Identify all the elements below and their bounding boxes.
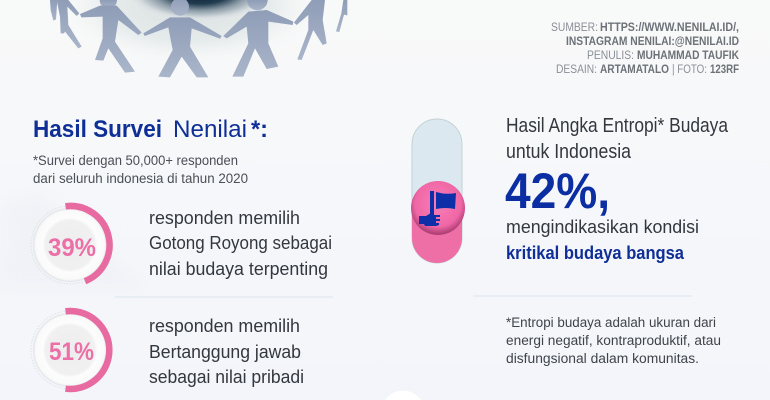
text: bertanggung jawab: Bertanggung jawab [149, 342, 301, 362]
heading: hasil survei nenilai: Hasil Survei [33, 116, 162, 143]
text: kondisi kritikal: kritikal budaya bangsa [506, 243, 685, 263]
credit line: desain and foto: | FOTO: [672, 64, 707, 76]
credit line: penulis [587, 50, 740, 62]
stat: 51 percent ring: 51% [49, 338, 94, 366]
text: bertanggung jawab [149, 316, 304, 387]
credit line: desain and foto: 123RF [710, 64, 739, 76]
text: bertanggung jawab: responden memilih [149, 316, 300, 336]
icon: hand holding flag [419, 191, 456, 226]
heading: hasil survei nenilai: *: [251, 116, 268, 143]
text: hasil angka entropi: Hasil Angka Entropi* Budaya [506, 115, 729, 137]
big number: 42 percent: 42%, [505, 163, 610, 219]
credit line: desain and foto: ARTAMATALO [600, 64, 669, 76]
credit line: sumber [551, 22, 739, 34]
stat: 51 percent ring [31, 311, 109, 389]
credit line: instagram: INSTAGRAM NENILAI:@NENILAI.ID [566, 36, 739, 48]
credit line: penulis: PENULIS: [587, 50, 634, 62]
credits [551, 22, 740, 76]
photo: circle of paper people around dark centre [50, 0, 347, 77]
text: gotong royong: responden memilih [149, 208, 300, 228]
survey note [33, 153, 248, 186]
survey note: dari seluruh indonesia di tahun 2020 [33, 171, 248, 186]
credit line: sumber: HTTPS://WWW.NENILAI.ID/, [600, 22, 739, 34]
text: bertanggung jawab: sebagai nilai pribadi [149, 367, 304, 387]
text: kondisi kritikal [506, 217, 699, 263]
text: kondisi kritikal: mengindikasikan kondisi [506, 217, 699, 237]
text: hasil angka entropi [506, 115, 729, 163]
text: gotong royong [149, 208, 332, 279]
footnote: definisi entropi budaya: energi negatif, kontraproduktif, atau [506, 333, 721, 348]
text: hasil angka entropi: untuk Indonesia [506, 141, 632, 163]
survey note: *Survei dengan 50,000+ responden [33, 153, 238, 168]
text: gotong royong: Gotong Royong sebagai [149, 233, 332, 253]
credit line: desain and foto [556, 64, 739, 76]
credit line: desain and foto: DESAIN: [556, 64, 597, 76]
heading: hasil survei nenilai [33, 116, 268, 143]
credit line: sumber: SUMBER: [551, 22, 598, 34]
heading: hasil survei nenilai: Nenilai [173, 116, 247, 143]
footnote: definisi entropi budaya [506, 315, 721, 366]
footnote: definisi entropi budaya: disfungsional dalam komunitas. [506, 351, 699, 366]
stat: 39 percent ring [31, 206, 110, 284]
toggle gauge with flag icon [411, 119, 465, 263]
bottom white circle [385, 391, 421, 400]
stat: 39 percent ring: 39% [48, 234, 96, 262]
footnote: definisi entropi budaya: *Entropi budaya adalah ukuran dari [506, 315, 716, 330]
text: gotong royong: nilai budaya terpenting [149, 259, 328, 279]
credit line: penulis: MUHAMMAD TAUFIK [637, 50, 740, 62]
